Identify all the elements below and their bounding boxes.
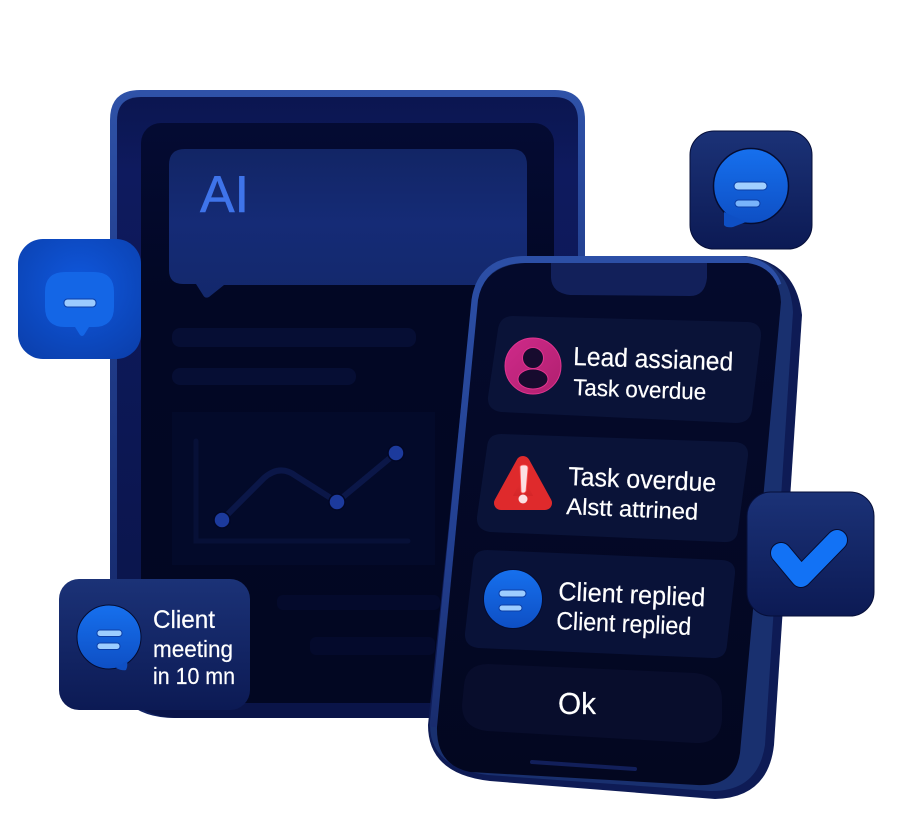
icon: blue message circle <box>484 570 542 628</box>
line chart <box>172 412 435 565</box>
notification subtitle: Client replied <box>556 607 692 641</box>
icon card: check mark <box>747 492 874 616</box>
notification: client replied <box>465 550 735 658</box>
callout text: in 10 mn <box>153 663 235 689</box>
notification title: Client replied <box>558 576 706 612</box>
placeholder text lines <box>172 328 416 385</box>
panel: phone <box>428 256 802 799</box>
icon card: top-right chat <box>690 131 812 249</box>
icon: chat bubble <box>77 605 141 670</box>
callout text: meeting <box>153 636 233 662</box>
notification subtitle: Alstt attrined <box>566 493 699 525</box>
notification: task overdue <box>477 434 748 542</box>
icon: red warning triangle <box>501 463 545 504</box>
notification subtitle: Task overdue <box>573 374 707 405</box>
callout: client meeting <box>59 579 250 710</box>
faint lower lines <box>277 595 440 655</box>
button: Ok: Ok <box>558 686 596 721</box>
heading: AI: AI <box>200 166 249 224</box>
notification title: Task overdue <box>568 461 717 497</box>
notification: lead assigned <box>488 316 761 423</box>
icon: pink person <box>505 338 561 394</box>
AI speech bubble <box>169 149 527 298</box>
callout text: Client <box>153 606 215 634</box>
panel: tablet <box>110 90 585 718</box>
home indicator <box>532 762 635 769</box>
phone notch <box>551 263 707 296</box>
notification title: Lead assianed <box>573 341 734 377</box>
callout text <box>153 606 235 689</box>
tablet screen <box>141 123 554 703</box>
button: Ok <box>462 664 722 743</box>
icon card: blue message <box>18 239 141 359</box>
